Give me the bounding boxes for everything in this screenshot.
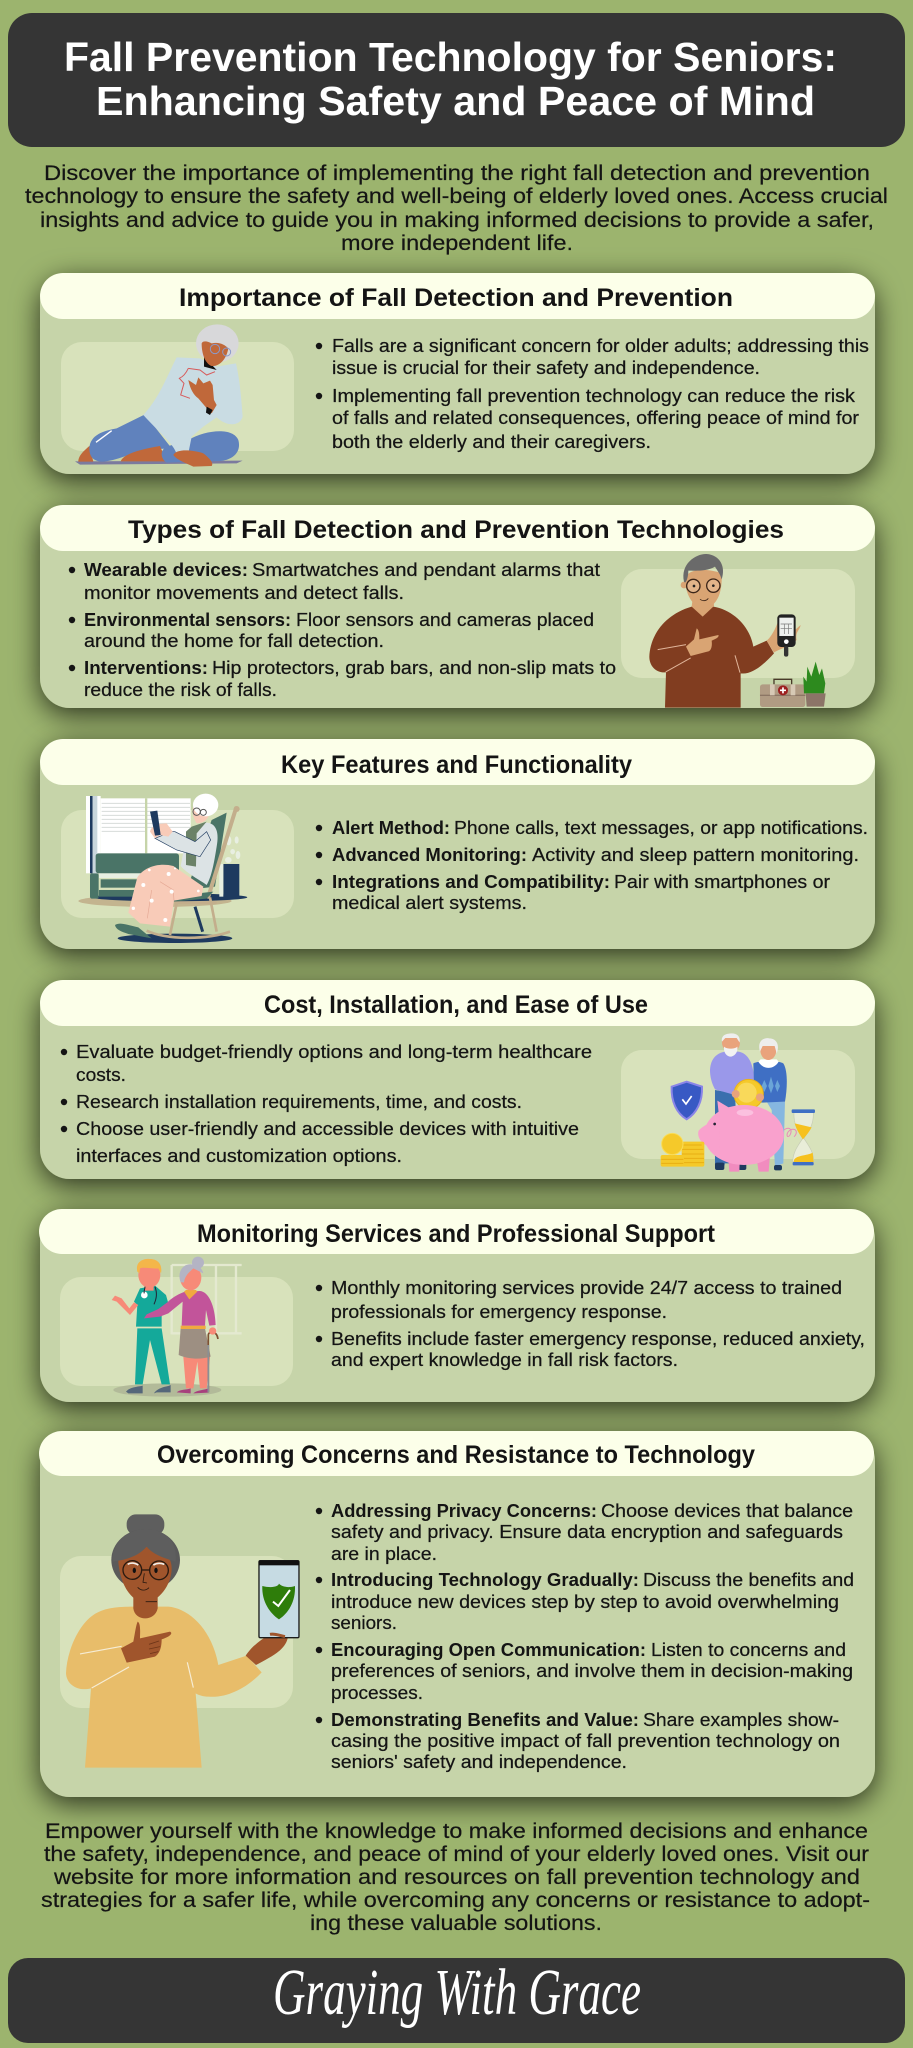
list: technology types: Wearable devices: xyxy=(84,560,248,580)
illustration: nurse helping woman with cane xyxy=(112,1257,242,1397)
list: technology types: monitor movements and detect falls. xyxy=(84,583,404,603)
list: technology types: Floor sensors and cameras placed xyxy=(296,610,594,630)
panel: key features xyxy=(40,739,875,949)
list: importance points: Implementing fall prevention technology can reduce the risk xyxy=(332,386,856,406)
heading: monitoring: Monitoring Services and Professional Support xyxy=(197,1220,716,1248)
footer banner xyxy=(8,1956,905,2043)
list: overcoming concerns points: safety and privacy. Ensure data encryption and safeguards xyxy=(331,1522,843,1542)
list: key features: Integrations and Compatibility: xyxy=(332,872,610,892)
list: overcoming concerns points: Listen to concerns and xyxy=(651,1640,846,1660)
list: key features: medical alert systems. xyxy=(332,893,527,913)
list: overcoming concerns points: seniors. xyxy=(331,1613,397,1633)
panel: overcoming concerns xyxy=(39,1431,875,1797)
list: importance points xyxy=(316,336,869,452)
heading: importance: Importance of Fall Detection and Prevention xyxy=(179,284,733,312)
list: technology types xyxy=(69,560,616,700)
list: monitoring points: Monthly monitoring services provide 24/7 access to trained xyxy=(331,1278,842,1298)
list: cost points: Choose user-friendly and accessible devices with intuitive xyxy=(76,1119,579,1139)
list: technology types: around the home for fall detection. xyxy=(84,631,384,651)
list: importance points: of falls and related consequences, offering peace of mind for xyxy=(332,408,859,428)
list: technology types: Smartwatches and pendant alarms that xyxy=(252,560,600,580)
list: key features: Phone calls, text messages, or app notifications. xyxy=(454,818,868,838)
list: overcoming concerns points: Addressing Privacy Concerns: xyxy=(331,1501,597,1521)
illustration: woman in rocking chair xyxy=(78,794,247,943)
intro paragraph: more independent life. xyxy=(341,232,573,255)
heading: cost: Cost, Installation, and Ease of Use xyxy=(264,991,648,1019)
list: overcoming concerns points: seniors' safety and independence. xyxy=(331,1752,627,1772)
list: overcoming concerns points: Introducing Technology Gradually: xyxy=(331,1570,639,1590)
footer banner: Graying With Grace xyxy=(273,1956,641,2029)
illustration: man with glucose meter xyxy=(649,554,826,708)
illustration: woman fallen holding chest xyxy=(75,324,243,467)
list: cost points: costs. xyxy=(76,1065,126,1085)
list: cost points: interfaces and customization options. xyxy=(76,1146,402,1166)
list: monitoring points: Benefits include faster emergency response, reduced anxiety, xyxy=(331,1329,865,1349)
list: technology types: Hip protectors, grab bars, and non-slip mats to xyxy=(212,658,616,678)
list: overcoming concerns points: are in place. xyxy=(331,1544,437,1564)
panel: monitoring services xyxy=(39,1209,875,1402)
closing paragraph xyxy=(41,1820,870,1935)
list: key features: Activity and sleep pattern monitoring. xyxy=(532,845,859,865)
intro paragraph: insights and advice to guide you in making informed decisions to provide a safer, xyxy=(40,209,874,232)
list: key features: Alert Method: xyxy=(332,818,450,838)
illustration: couple with piggy bank xyxy=(661,1033,815,1172)
list: monitoring points: professionals for emergency response. xyxy=(331,1302,667,1322)
panel: importance of fall detection xyxy=(40,273,875,474)
list: technology types: reduce the risk of falls. xyxy=(84,680,277,700)
heading: overcoming concerns: Overcoming Concerns and Resistance to Technology xyxy=(157,1441,755,1469)
list: overcoming concerns points: Demonstrating Benefits and Value: xyxy=(331,1710,639,1730)
closing paragraph: Empower yourself with the knowledge to make informed decisions and enhance xyxy=(45,1820,868,1843)
list: monitoring points xyxy=(316,1278,865,1370)
list: overcoming concerns points xyxy=(316,1501,854,1772)
list: importance points: issue is crucial for their safety and independence. xyxy=(332,358,760,378)
closing paragraph: ing these valuable solutions. xyxy=(310,1912,602,1935)
title banner xyxy=(8,13,905,147)
panel: cost and installation xyxy=(40,980,875,1179)
closing paragraph: strategies for a safer life, while overcoming any concerns or resistance to adopt- xyxy=(41,1889,870,1912)
list: overcoming concerns points: Share examples show- xyxy=(643,1710,839,1730)
list: overcoming concerns points: introduce new devices step by step to avoid overwhelming xyxy=(331,1592,839,1612)
list: overcoming concerns points: processes. xyxy=(331,1683,423,1703)
intro paragraph: Discover the importance of implementing the right fall detection and prevention xyxy=(44,162,870,185)
list: overcoming concerns points: Choose devices that balance xyxy=(601,1501,853,1521)
list: technology types: Environmental sensors: xyxy=(84,610,291,630)
title banner: Fall Prevention Technology for Seniors: xyxy=(64,34,837,80)
intro paragraph: technology to ensure the safety and well-being of elderly loved ones. Access crucial xyxy=(25,185,888,208)
list: cost points xyxy=(61,1042,592,1166)
list: technology types: Interventions: xyxy=(84,658,208,678)
closing paragraph: the safety, independence, and peace of mind of your elderly loved ones. Visit our xyxy=(44,1843,869,1866)
panel: types of technologies xyxy=(40,505,875,708)
list: importance points: both the elderly and their caregivers. xyxy=(332,432,651,452)
list: cost points: Evaluate budget-friendly options and long-term healthcare xyxy=(76,1042,592,1062)
list: importance points: Falls are a significant concern for older adults; addressing this xyxy=(332,336,869,356)
list: cost points: Research installation requirements, time, and costs. xyxy=(76,1092,522,1112)
list: overcoming concerns points: Encouraging Open Communication: xyxy=(331,1640,646,1660)
list: monitoring points: and expert knowledge in fall risk factors. xyxy=(331,1350,678,1370)
list: overcoming concerns points: preferences of seniors, and involve them in decision-making xyxy=(331,1661,853,1681)
list: key features xyxy=(316,818,868,913)
title banner: Enhancing Safety and Peace of Mind xyxy=(96,78,815,124)
list: key features: Advanced Monitoring: xyxy=(332,845,527,865)
closing paragraph: website for more information and resources on fall prevention technology and xyxy=(53,1866,860,1889)
illustration: woman holding phone with shield xyxy=(66,1514,299,1768)
list: overcoming concerns points: Discuss the benefits and xyxy=(643,1570,854,1590)
list: overcoming concerns points: casing the positive impact of fall prevention technology on xyxy=(331,1731,840,1751)
intro paragraph xyxy=(25,162,888,255)
heading: key features: Key Features and Functionality xyxy=(281,751,632,779)
list: key features: Pair with smartphones or xyxy=(614,872,830,892)
heading: types: Types of Fall Detection and Prevention Technologies xyxy=(128,516,784,544)
